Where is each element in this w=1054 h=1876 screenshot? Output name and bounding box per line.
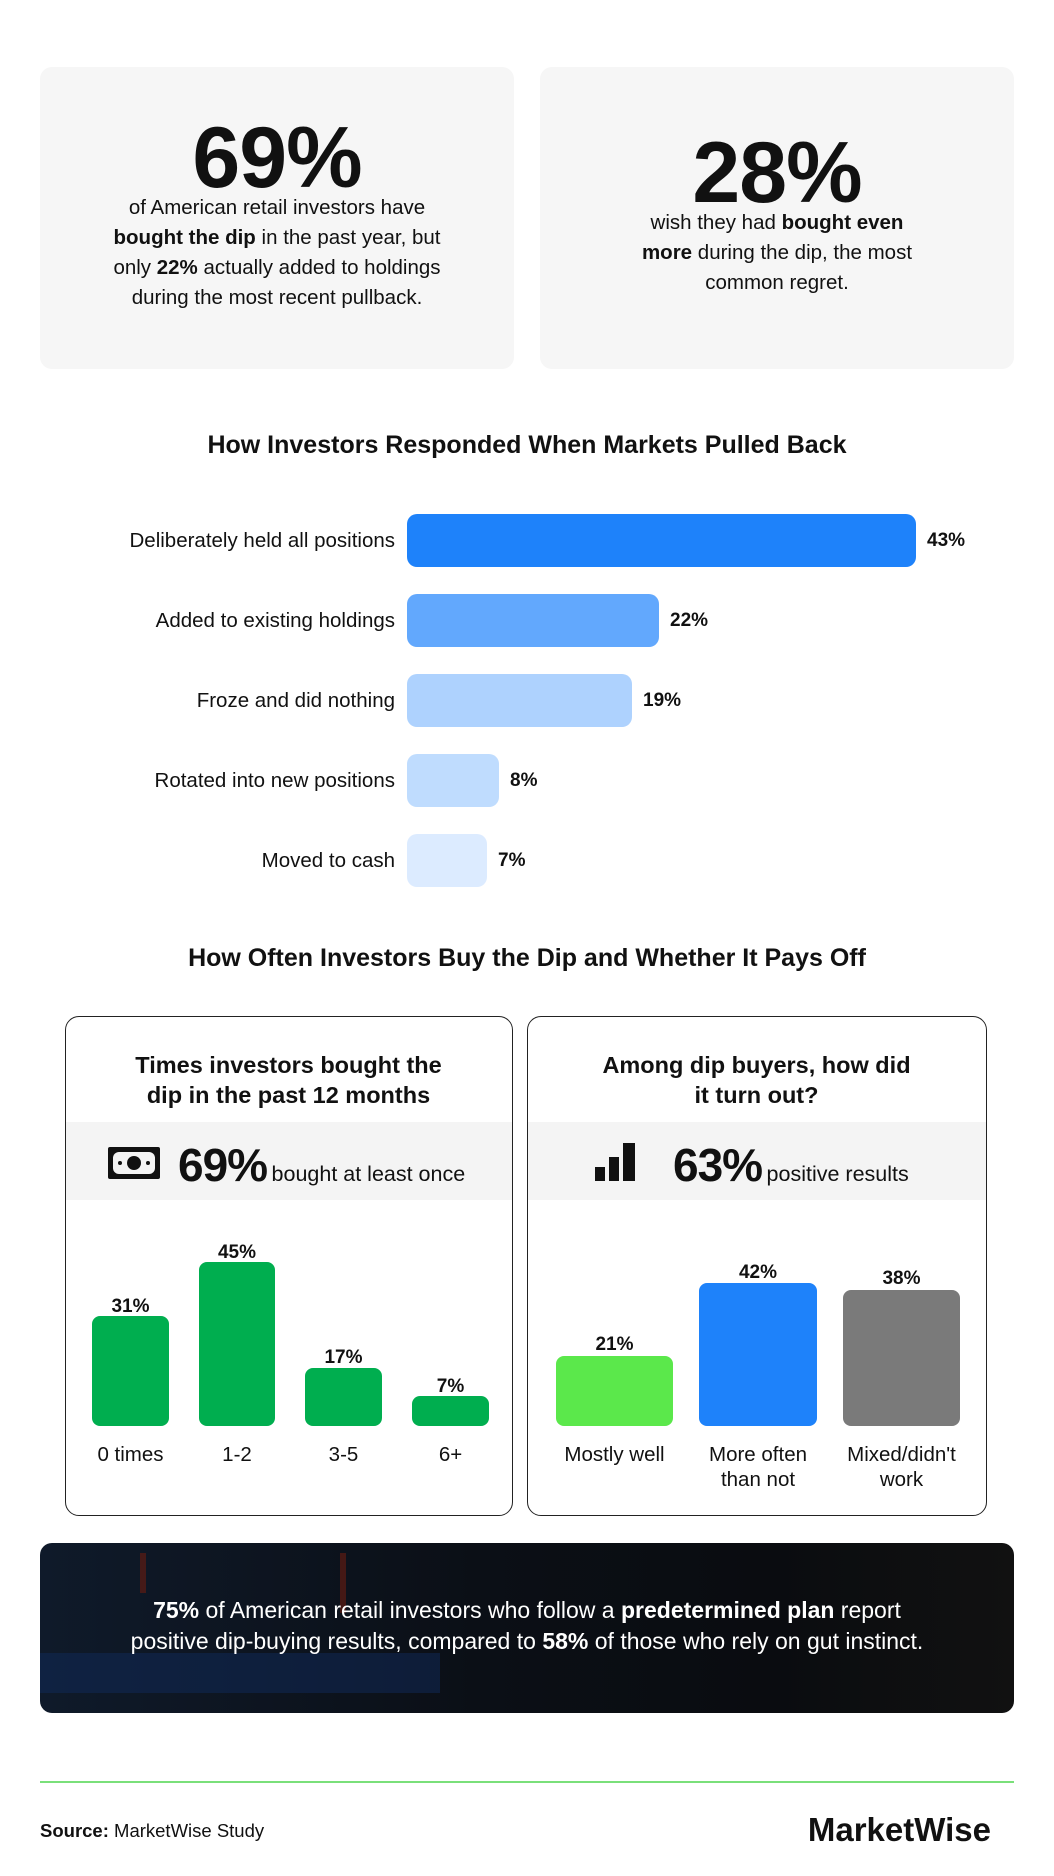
bars: outcomes: work (880, 1468, 923, 1491)
panel: times bought (65, 1016, 513, 1516)
row: froze: 19% (643, 690, 681, 711)
bars: outcomes: 21% (595, 1334, 634, 1355)
card text (642, 211, 912, 294)
icon: money bill (108, 1147, 160, 1179)
bars: outcomes: 42% (739, 1262, 777, 1283)
panel title: dip in the past 12 months (147, 1082, 430, 1108)
card text: only 22% actually added to holdings (113, 256, 441, 279)
row: added: 22% (670, 610, 708, 631)
card text: during the most recent pullback. (132, 286, 422, 309)
bar chart: responses (129, 514, 965, 887)
row: rotated: 8% (510, 770, 537, 791)
source: Source: MarketWise Study (40, 1820, 264, 1841)
bars: times (92, 1242, 489, 1466)
panel title: Times investors bought the (135, 1052, 442, 1078)
bars: outcomes (556, 1262, 960, 1491)
bars: times: 6+ (439, 1443, 462, 1466)
panel title (602, 1052, 911, 1108)
stat band (66, 1122, 512, 1200)
row: rotated (155, 754, 537, 807)
callout text: 75% of American retail investors who follow a predetermined plan report (153, 1597, 901, 1623)
bars: outcomes: Mixed/didn't (847, 1443, 956, 1466)
panel title: Among dip buyers, how did (602, 1052, 911, 1078)
panel: outcomes (527, 1016, 987, 1516)
panel title (135, 1052, 442, 1108)
row: cash: 7% (498, 850, 525, 871)
row: cash (262, 834, 525, 887)
callout text (131, 1597, 923, 1654)
big number 28%: 28% (692, 125, 862, 221)
panel title: it turn out? (694, 1082, 818, 1108)
bars: outcomes: 38% (882, 1268, 921, 1289)
row: added (156, 594, 708, 647)
row: froze: Froze and did nothing (197, 689, 395, 712)
stat text: 63% positive results (673, 1139, 909, 1191)
card text: common regret. (705, 271, 849, 294)
card: 28% stat (540, 67, 1014, 369)
bars: times: 45% (218, 1242, 256, 1263)
big number 69%: 69% (192, 110, 362, 206)
bars: times: 3-5 (329, 1443, 358, 1466)
bars: times: 31% (111, 1296, 150, 1317)
stat text: 69% bought at least once (178, 1139, 465, 1191)
row: froze (197, 674, 681, 727)
heading: dip section: How Often Investors Buy the Dip and Whether It Pays Off (188, 944, 866, 972)
callout banner (40, 1543, 1014, 1713)
icon: signal bars (595, 1143, 635, 1181)
bars: times: 0 times (97, 1443, 164, 1466)
row: added: Added to existing holdings (156, 609, 395, 632)
card text: wish they had bought even (651, 211, 903, 234)
bars: times: 7% (437, 1376, 464, 1397)
row: held (129, 514, 965, 567)
card text: bought the dip in the past year, but (114, 226, 440, 249)
row: held: Deliberately held all positions (129, 529, 395, 552)
heading: responses chart: How Investors Responded When Markets Pulled Back (207, 431, 847, 459)
row: held: 43% (927, 530, 965, 551)
bars: outcomes: than not (721, 1468, 795, 1491)
callout text: positive dip-buying results, compared to 58% of those who rely on gut instinct. (131, 1628, 923, 1654)
bars: outcomes: Mostly well (564, 1443, 665, 1466)
row: cash: Moved to cash (262, 849, 395, 872)
logo: MarketWise: MarketWise (808, 1811, 991, 1848)
bars: times: 17% (324, 1347, 363, 1368)
stat band (528, 1122, 986, 1200)
card text (113, 196, 441, 309)
row: rotated: Rotated into new positions (155, 769, 395, 792)
bars: outcomes: More often (709, 1443, 807, 1466)
card text: more during the dip, the most (642, 241, 912, 264)
bars: times: 1-2 (222, 1443, 252, 1466)
card: 69% stat (40, 67, 514, 369)
card text: of American retail investors have (129, 196, 425, 219)
